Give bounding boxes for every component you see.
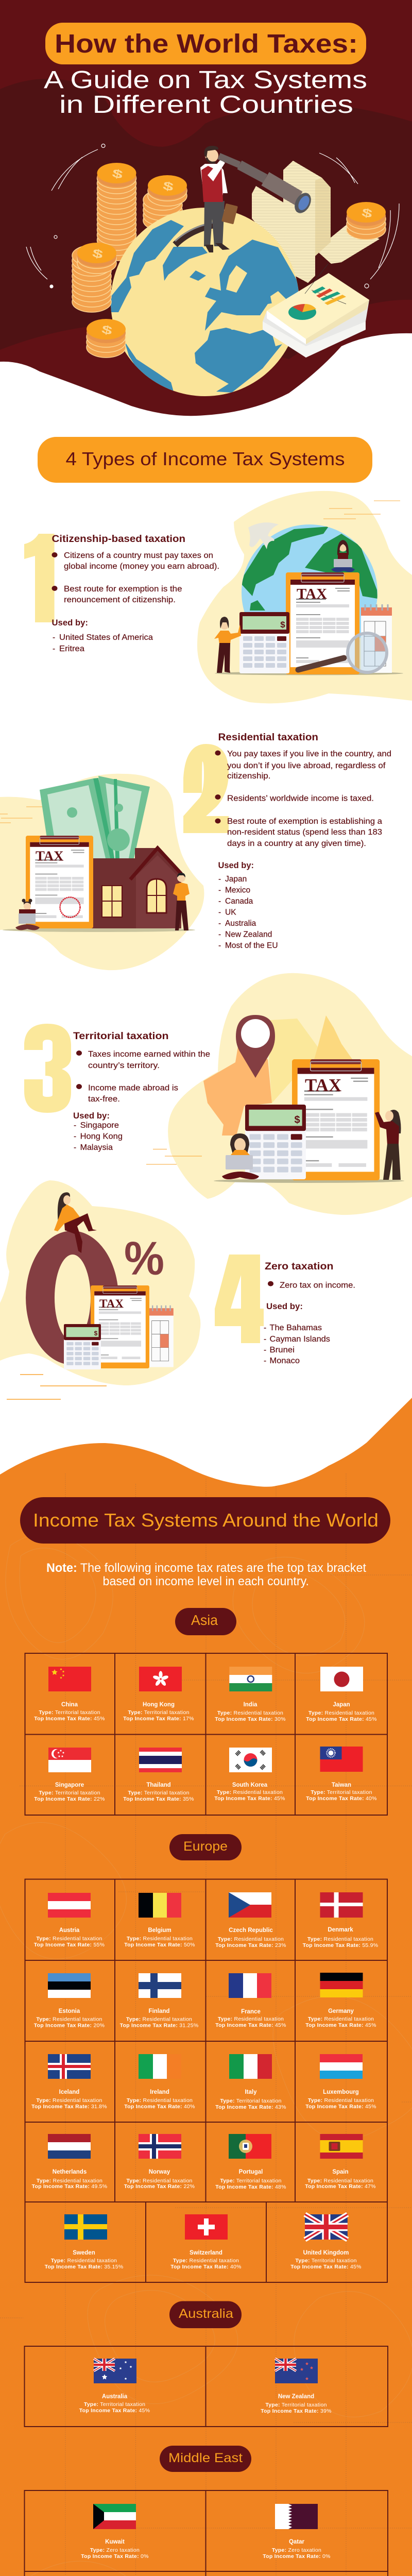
region pill: Asia: Asia: [191, 1612, 218, 1628]
country: Hong Kong: [123, 1667, 194, 1722]
country: China: Top Income Tax Rate: 45%: [34, 1716, 105, 1722]
country: Czech Republic: Top Income Tax Rate: 23%: [215, 1942, 286, 1948]
subtitle: [44, 66, 367, 118]
country: Norway: Top Income Tax Rate: 22%: [124, 2183, 195, 2190]
country: Netherlands: Netherlands: [53, 2169, 87, 2175]
used by list: -: [264, 1335, 266, 1344]
used by list: -: [218, 897, 221, 906]
woman pointing at form: [375, 1110, 401, 1180]
country: Netherlands: Type: Residential taxation: [37, 2178, 102, 2184]
country: United Kingdom: [290, 2214, 362, 2270]
bullets: [215, 750, 391, 848]
title pill: [45, 23, 366, 64]
country: India: India: [244, 1702, 258, 1708]
numeral 4: [215, 1255, 264, 1343]
woman sitting on clipboard: [331, 540, 355, 572]
illustration: zero percent with tax form: %: [124, 1232, 164, 1285]
panel: residential taxation: [0, 732, 391, 970]
country: Finland: [120, 1973, 198, 2029]
main heading: Income Tax Systems Around the World: [20, 1497, 390, 1544]
panel: citizenship-based taxation: [24, 491, 412, 703]
country: Thailand: Thailand: [146, 1782, 171, 1788]
country: New Zealand: New Zealand: [278, 2394, 314, 2400]
country: Germany: Germany: [328, 2008, 354, 2014]
country: Japan: [306, 1667, 377, 1722]
country: Japan: Type: Residential taxation: [308, 1710, 374, 1716]
country: Singapore: [34, 1748, 105, 1802]
country: Hong Kong: Type: Territorial taxation: [128, 1709, 190, 1716]
country: Switzerland: Switzerland: [190, 2250, 222, 2256]
country: Finland: Top Income Tax Rate: 31.25%: [120, 2023, 198, 2029]
country: China: China: [61, 1702, 78, 1708]
country: New Zealand: Top Income Tax Rate: 39%: [261, 2408, 332, 2414]
country: Hong Kong: Hong Kong: [143, 1702, 175, 1708]
used by list: Singapore: [80, 1121, 119, 1130]
table: Middle East: [25, 2490, 388, 2576]
panel: zero taxation: [0, 1180, 355, 1399]
country: Thailand: Top Income Tax Rate: 35%: [123, 1796, 194, 1802]
country: Italy: Italy: [245, 2089, 257, 2095]
country: Ireland: Ireland: [150, 2089, 169, 2095]
country: Finland: Finland: [149, 2008, 169, 2014]
icon: report papers with charts: [263, 264, 369, 358]
used by list: -: [74, 1121, 76, 1130]
country: Germany: Type: Residential taxation: [308, 2016, 374, 2022]
country: Belgium: Type: Residential taxation: [127, 1936, 193, 1942]
bullets: Taxes income earned within the: [88, 1050, 210, 1059]
header panel: [0, 0, 412, 438]
country: Spain: Top Income Tax Rate: 47%: [305, 2183, 376, 2190]
numeral 3: [24, 1024, 71, 1113]
used by list: -: [218, 919, 221, 928]
icon: front coin stacks: $: [360, 206, 373, 221]
country: South Korea: Type: Residential taxation: [217, 1789, 283, 1795]
country: Japan: Top Income Tax Rate: 45%: [306, 1716, 377, 1722]
used by list: [218, 861, 278, 950]
illustration: map pin with tax form: [146, 973, 412, 1215]
country: Ireland: Top Income Tax Rate: 40%: [124, 2104, 195, 2110]
country: Qatar: Type: Zero taxation: [272, 2547, 321, 2553]
country: France: Top Income Tax Rate: 45%: [215, 2022, 286, 2028]
country: Czech Republic: [215, 1892, 286, 1948]
used by list: Canada: [225, 897, 253, 906]
region pill: Australia: Australia: [179, 2307, 233, 2321]
table: Asia: [25, 1653, 387, 1815]
used by list: The Bahamas: [270, 1324, 322, 1332]
country: Singapore: Top Income Tax Rate: 22%: [34, 1796, 105, 1802]
illustration: zero percent with tax form: [0, 1180, 200, 1399]
country: Switzerland: [170, 2214, 242, 2270]
country: Singapore: Type: Territorial taxation: [39, 1790, 100, 1796]
country: Spain: Spain: [332, 2169, 349, 2175]
bullets: tax-free.: [88, 1095, 120, 1104]
orange section background: [0, 1398, 412, 2576]
illustration: globe with tax form: $: [280, 620, 285, 630]
subtitle: A Guide on Tax Systems: [44, 66, 367, 94]
bullets: Citizens of a country must pay taxes on: [64, 551, 213, 560]
used by list: -: [218, 930, 221, 939]
region pill: Europe: Europe: [183, 1839, 228, 1854]
country: India: [215, 1667, 286, 1722]
icon: front coin stacks: $: [91, 247, 104, 261]
bullets: global income (money you earn abroad).: [64, 562, 219, 571]
country: Spain: Type: Residential taxation: [307, 2178, 373, 2184]
country: United Kingdom: United Kingdom: [303, 2250, 349, 2256]
used by list: New Zealand: [225, 930, 272, 939]
country: Italy: [215, 2054, 286, 2110]
illustration: globe with tax form: TAX: [297, 586, 327, 602]
illustration: house with cash and tax form: TAX: [36, 848, 64, 863]
country: Qatar: [263, 2504, 331, 2560]
country: Czech Republic: Type: Residential taxation: [218, 1936, 284, 1942]
used by list: Used by:: [52, 618, 88, 628]
used by list: [73, 1111, 123, 1152]
country: Germany: Top Income Tax Rate: 45%: [305, 2022, 376, 2028]
country: Austria: Type: Residential taxation: [36, 1936, 102, 1942]
country: Japan: Japan: [333, 1702, 350, 1708]
country: China: [34, 1667, 105, 1722]
region pill: Australia: [169, 2301, 242, 2328]
used by list: Hong Kong: [80, 1132, 123, 1141]
used by list: Australia: [225, 919, 256, 928]
illustration: globe with tax form: [197, 491, 412, 703]
country: India: Type: Residential taxation: [217, 1710, 283, 1716]
country: India: Top Income Tax Rate: 30%: [215, 1716, 286, 1722]
illustration: map pin with tax form: $: [294, 1114, 300, 1126]
country: Taiwan: Type: Territorial taxation: [311, 1789, 372, 1795]
country: Portugal: Top Income Tax Rate: 48%: [215, 2184, 286, 2190]
country: Denmark: [303, 1892, 378, 1948]
country: Norway: [124, 2134, 195, 2190]
used by list: Cayman Islands: [270, 1335, 330, 1344]
used by list: -: [53, 633, 55, 642]
country: Qatar: Qatar: [289, 2539, 305, 2545]
numeral 1: [24, 534, 55, 622]
country: New Zealand: [261, 2359, 332, 2414]
man with folded arms: [173, 873, 190, 930]
region pill: Asia: [175, 1608, 236, 1635]
used by list: -: [264, 1346, 266, 1354]
used by list: Used by:: [218, 861, 254, 870]
used by list: -: [218, 875, 221, 884]
panel: territorial taxation: [24, 973, 412, 1215]
country: Ireland: [124, 2054, 195, 2110]
country: Portugal: Portugal: [239, 2169, 263, 2175]
used by list: Eritrea: [59, 645, 84, 653]
bullets: Zero tax on income.: [280, 1281, 355, 1290]
country: Sweden: Type: Residential taxation: [51, 2258, 117, 2264]
country: Luxembourg: Luxembourg: [323, 2089, 359, 2095]
country: France: France: [241, 2009, 261, 2015]
main heading: Income Tax Systems Around the World: Income Tax Systems Around the World: [33, 1510, 379, 1531]
icon: globe: [111, 208, 299, 396]
region pill: Middle East: Middle East: [168, 2451, 243, 2465]
country: Sweden: Top Income Tax Rate: 35.15%: [45, 2264, 123, 2270]
country: Iceland: Iceland: [59, 2089, 79, 2095]
country: Australia: Type: Territorial taxation: [84, 2401, 145, 2408]
used by list: -: [264, 1357, 266, 1365]
icon: front coin stacks: [72, 202, 386, 358]
country: Kuwait: [81, 2504, 149, 2560]
table: Europe: [25, 1879, 387, 2282]
bullets: Best route for exemption is the: [64, 585, 182, 594]
country: Norway: Type: Residential taxation: [126, 2178, 193, 2184]
country: Czech Republic: Czech Republic: [229, 1927, 273, 1934]
country: Taiwan: [306, 1747, 377, 1802]
icon: back coin stacks: $: [111, 167, 124, 181]
region pill: Europe: [169, 1834, 242, 1860]
girl with laptop: [15, 899, 40, 930]
used by list: Malaysia: [80, 1143, 113, 1152]
heading: Citizenship-based taxation: [52, 534, 185, 545]
house: [89, 848, 181, 928]
used by list: Brunei: [270, 1346, 295, 1354]
used by list: -: [218, 908, 221, 917]
illustration: zero percent with tax form: $: [94, 1330, 98, 1337]
used by list: [52, 618, 153, 653]
country: France: Type: Residential taxation: [218, 2016, 284, 2022]
used by list: -: [74, 1143, 76, 1152]
country: Austria: [34, 1893, 105, 1948]
used by list: United States of America: [59, 633, 153, 642]
icon: scroll of paper: [252, 161, 380, 283]
country: New Zealand: Type: Territorial taxation: [265, 2402, 327, 2408]
country: Kuwait: Type: Zero taxation: [90, 2547, 140, 2553]
illustration: map pin with tax form: TAX: [305, 1075, 341, 1095]
used by list: Monaco: [270, 1357, 300, 1365]
country: Belgium: [124, 1893, 195, 1948]
country: Luxembourg: Top Income Tax Rate: 45%: [305, 2104, 376, 2110]
table: Australia: [25, 2346, 388, 2427]
country: Belgium: Top Income Tax Rate: 50%: [124, 1942, 195, 1948]
used by list: -: [264, 1324, 266, 1332]
country: Austria: Top Income Tax Rate: 55%: [34, 1942, 105, 1948]
bullets: Residents’ worldwide income is taxed.: [227, 794, 374, 803]
country: Iceland: Top Income Tax Rate: 31.8%: [31, 2104, 107, 2110]
bullets: non-resident status (spend less than 183: [227, 828, 382, 837]
country: Australia: Australia: [102, 2394, 128, 2400]
country: Iceland: Type: Residential taxation: [36, 2097, 102, 2104]
section heading: 4 Types of Income Tax Systems: [38, 437, 372, 483]
country: Sweden: Sweden: [73, 2250, 95, 2256]
bullets: renouncement of citizenship.: [64, 596, 176, 604]
heading: Residential taxation: [218, 732, 318, 743]
country: Austria: Austria: [59, 1927, 80, 1934]
heading: Zero taxation: [265, 1261, 334, 1272]
country: Belgium: Belgium: [148, 1927, 171, 1934]
illustration: man with telescope: [175, 146, 314, 252]
country: South Korea: South Korea: [232, 1782, 268, 1788]
country: Australia: Top Income Tax Rate: 45%: [79, 2408, 150, 2414]
country: Australia: [79, 2359, 150, 2414]
country: Switzerland: Top Income Tax Rate: 40%: [170, 2264, 242, 2270]
country: Estonia: Estonia: [59, 2008, 80, 2014]
country: Luxembourg: Type: Residential taxation: [308, 2097, 374, 2104]
country: Denmark: Type: Residential taxation: [307, 1936, 373, 1942]
country: Kuwait: Kuwait: [105, 2539, 125, 2545]
country: Denmark: Top Income Tax Rate: 55.9%: [303, 1942, 378, 1948]
region pill: Middle East: [160, 2446, 251, 2472]
used by list: UK: [225, 908, 236, 917]
country: Portugal: [215, 2134, 286, 2190]
country: Estonia: [34, 1973, 105, 2029]
heading: Territorial taxation: [73, 1031, 169, 1042]
bullets: [52, 551, 219, 604]
used by list: Japan: [225, 875, 247, 884]
country: China: Type: Territorial taxation: [39, 1709, 100, 1716]
numeral 2: [183, 744, 229, 833]
country: France: [215, 1973, 286, 2028]
bullets: Income made abroad is: [88, 1084, 178, 1092]
used by list: Mexico: [225, 886, 250, 894]
used by list: Used by:: [73, 1111, 110, 1121]
woman with laptop: [222, 1133, 259, 1179]
country: Italy: Top Income Tax Rate: 43%: [215, 2104, 286, 2110]
woman beside calculator: [214, 617, 241, 673]
icon: back coin stacks: $: [162, 179, 175, 194]
country: Norway: Norway: [149, 2169, 170, 2175]
icon: map pin: [236, 1015, 275, 1078]
decorative motion arcs: [26, 144, 399, 288]
bullets: country’s territory.: [88, 1061, 160, 1070]
bullets: You pay taxes if you live in the country, and: [227, 750, 391, 758]
note text: based on income level in each country.: [103, 1574, 309, 1588]
country: Iceland: [31, 2054, 107, 2110]
bullets: [76, 1050, 210, 1104]
country: Hong Kong: Top Income Tax Rate: 17%: [123, 1716, 194, 1722]
used by list: -: [74, 1132, 76, 1141]
country: Finland: Type: Residential taxation: [126, 2016, 192, 2023]
bullets: days in a country at any given time).: [227, 839, 366, 848]
used by list: [264, 1302, 330, 1365]
subtitle: in Different Countries: [59, 91, 353, 118]
country: Thailand: [123, 1748, 194, 1802]
country: South Korea: Top Income Tax Rate: 45%: [214, 1795, 285, 1802]
section heading: 4 Types of Income Tax Systems: 4 Types of Income Tax Systems: [66, 448, 345, 469]
illustration: zero percent with tax form: TAX: [99, 1297, 124, 1310]
country: Denmark: Denmark: [328, 1927, 353, 1933]
woman sitting on zero: [54, 1192, 97, 1253]
country: Switzerland: Type: Residential taxation: [173, 2258, 239, 2264]
country: Netherlands: Top Income Tax Rate: 49.5%: [32, 2183, 107, 2190]
icon: back coin stacks: [97, 163, 187, 261]
country: Qatar: Top Income Tax Rate: 0%: [263, 2553, 331, 2560]
illustration: house with cash and tax form: [0, 774, 204, 970]
country: Sweden: [45, 2214, 123, 2270]
country: Italy: Type: Territorial taxation: [220, 2098, 282, 2104]
country: South Korea: [214, 1748, 285, 1802]
country: Estonia: Type: Residential taxation: [36, 2016, 102, 2023]
country: Singapore: Singapore: [55, 1782, 84, 1788]
country: Spain: [305, 2134, 376, 2190]
country: Thailand: Type: Territorial taxation: [128, 1790, 190, 1796]
country: Portugal: Type: Territorial taxation: [220, 2178, 282, 2184]
country: Netherlands: [32, 2134, 107, 2190]
country: United Kingdom: Type: Territorial taxation: [295, 2258, 357, 2264]
title pill: How the World Taxes:: [55, 29, 358, 58]
used by list: Most of the EU: [225, 941, 278, 950]
country: Ireland: Type: Residential taxation: [127, 2097, 193, 2104]
country: Germany: [305, 1973, 376, 2028]
used by list: Used by:: [266, 1302, 303, 1311]
icon: front coin stacks: $: [100, 323, 113, 337]
country: Luxembourg: [305, 2054, 376, 2110]
country: Estonia: Top Income Tax Rate: 20%: [34, 2023, 105, 2029]
bullets: citizenship.: [227, 772, 271, 781]
note text: Note: The following income tax rates are the top tax bracket: [46, 1561, 366, 1575]
used by list: -: [218, 941, 221, 950]
country: United Kingdom: Top Income Tax Rate: 45%: [290, 2264, 362, 2270]
bullets: Best route of exemption is establishing a: [227, 817, 382, 826]
bullets: you don’t if you live abroad, regardless of: [227, 761, 386, 770]
country: Kuwait: Top Income Tax Rate: 0%: [81, 2553, 149, 2560]
country: Taiwan: Taiwan: [332, 1782, 351, 1788]
used by list: -: [218, 886, 221, 894]
note text: [46, 1561, 366, 1588]
country: Taiwan: Top Income Tax Rate: 40%: [306, 1795, 377, 1802]
used by list: -: [53, 645, 55, 653]
